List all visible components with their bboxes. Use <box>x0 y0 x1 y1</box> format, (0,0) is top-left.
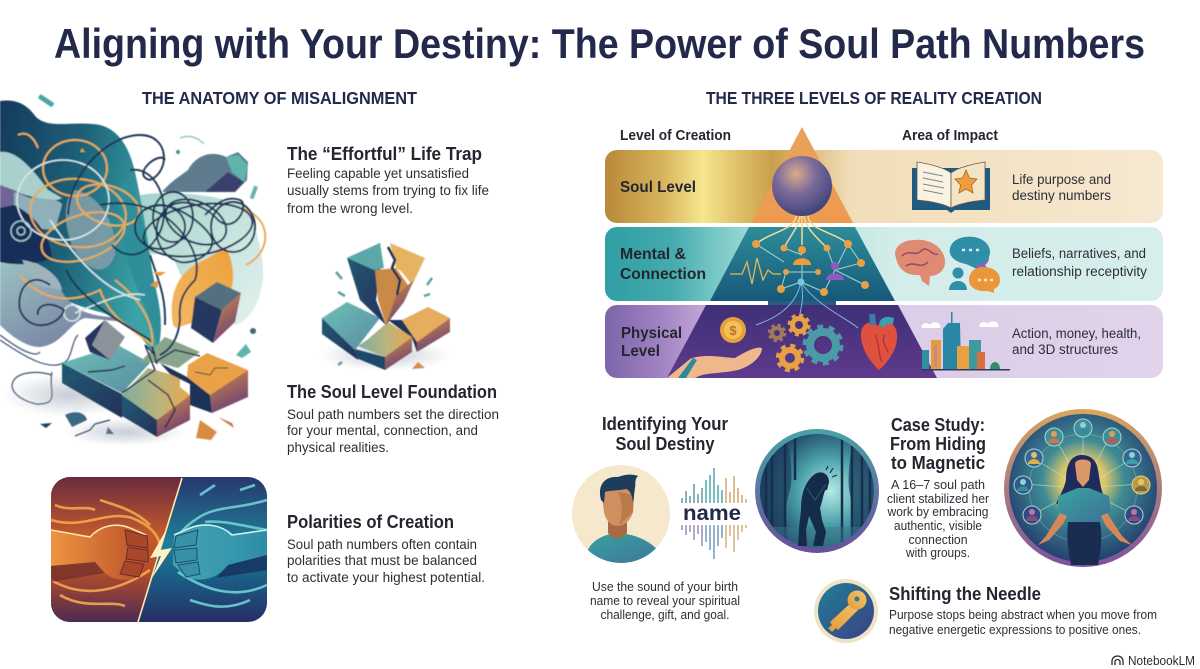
text: birth name instructions: Use the sound of your birth <box>592 580 738 594</box>
illustration: hiding figure behind bars <box>755 429 879 560</box>
icon: golden key <box>814 579 878 643</box>
heading: identifying your soul destiny: Identifying Your <box>602 414 728 434</box>
text: polarities of creation: Soul path numbers often contain <box>287 537 477 552</box>
band: physical level <box>605 305 1163 378</box>
text: the effortful life trap: from the wrong level. <box>287 201 413 216</box>
illustration: person portrait <box>572 465 670 567</box>
text: birth name instructions: name to reveal your spiritual <box>590 594 740 608</box>
icon: coin in open hand: $ <box>729 323 737 338</box>
text: birth name instructions <box>590 580 740 622</box>
panel: clashing fists illustration <box>51 477 267 622</box>
text: polarities of creation: to activate your highest potential. <box>287 570 485 585</box>
text: the effortful life trap: Feeling capable yet unsatisfied <box>287 166 469 181</box>
icon: brain and speech bubbles <box>895 237 1000 293</box>
band: mental and connection: Connection <box>620 266 706 283</box>
text: the soul level foundation: physical realities. <box>287 440 389 455</box>
band: soul level: destiny numbers <box>1012 188 1111 203</box>
soul sphere <box>772 156 832 216</box>
text: the effortful life trap: usually stems from trying to fix life <box>287 183 489 198</box>
icon: city skyline <box>922 312 1010 370</box>
icon: gears <box>769 315 842 370</box>
icon: open book with star <box>912 162 990 213</box>
text: case study body: authentic, visible <box>894 518 982 533</box>
cracked slab <box>40 328 256 440</box>
text: the effortful life trap: The “Effortful” Life Trap <box>287 143 482 164</box>
icon: broken block on cracked slabs <box>319 243 451 371</box>
icon: sound wave with name: name <box>683 502 741 525</box>
text: the soul level foundation: Soul path numbers set the direction <box>287 407 499 422</box>
heading: identifying your soul destiny: Soul Destiny <box>616 434 714 454</box>
band: soul level: Life purpose and <box>1012 172 1111 187</box>
band: physical level: Physical <box>621 325 682 342</box>
text: case study body: client stabilized her <box>887 491 990 506</box>
text: birth name instructions: challenge, gift, and goal. <box>600 608 730 622</box>
heading: case study <box>890 414 986 473</box>
watermark: notebooklm: NotebookLM <box>1128 654 1195 668</box>
band: physical level: Action, money, health, <box>1012 326 1141 341</box>
woman figure <box>1038 455 1132 565</box>
pyramid <box>667 127 937 378</box>
heading: case study: to Magnetic <box>891 452 985 473</box>
tangled scribble lines <box>11 134 265 355</box>
band: physical level: Level <box>621 343 660 360</box>
tumbling cube <box>85 320 125 360</box>
text: the soul level foundation: for your mental, connection, and <box>287 423 478 438</box>
band: physical level: and 3D structures <box>1012 342 1118 357</box>
band: soul level: Soul Level <box>620 179 696 196</box>
band: mental and connection <box>605 227 1163 301</box>
heading: the anatomy of misalignment: THE ANATOMY OF MISALIGNMENT <box>142 88 417 108</box>
icon: heart <box>861 314 897 370</box>
heading: identifying your soul destiny <box>602 414 728 454</box>
text: polarities of creation <box>287 511 485 585</box>
text: shifting the needle: Shifting the Needle <box>889 583 1041 604</box>
text: the soul level foundation <box>287 381 499 455</box>
text: case study body: with groups. <box>905 545 970 560</box>
text: polarities of creation: polarities that must be balanced <box>287 553 477 568</box>
illustration: magnetic woman with connections <box>1004 409 1162 567</box>
text: shifting the needle: Purpose stops being abstract when you move from <box>889 607 1157 622</box>
column heading: area of impact: Area of Impact <box>902 128 998 144</box>
band: mental and connection: Mental & <box>620 246 686 263</box>
text: the soul level foundation: The Soul Level Foundation <box>287 381 497 402</box>
band: mental and connection: relationship receptivity <box>1012 264 1147 279</box>
text: shifting the needle: negative energetic expressions to positive ones. <box>889 622 1141 637</box>
icon: coin in open hand <box>667 317 762 378</box>
storm cloud block <box>162 152 248 192</box>
rays from sphere <box>756 216 848 248</box>
heading: case study: From Hiding <box>890 433 986 454</box>
network of person icons <box>1014 419 1150 524</box>
icon: sound wave with name <box>682 468 746 559</box>
band: mental and connection: Beliefs, narratives, and <box>1012 246 1146 261</box>
band: soul level <box>605 150 1163 223</box>
text: case study body: connection <box>908 532 968 547</box>
network nodes <box>730 244 865 328</box>
text: polarities of creation: Polarities of Creation <box>287 511 454 532</box>
text: case study body: A 16–7 soul path <box>891 477 985 492</box>
heading: the three levels of reality creation: THE THREE LEVELS OF REALITY CREATION <box>706 88 1042 108</box>
column heading: level of creation: Level of Creation <box>620 128 731 144</box>
text: case study body <box>887 477 990 560</box>
heading: case study: Case Study: <box>891 414 985 435</box>
text: the effortful life trap <box>287 143 489 216</box>
text: case study body: work by embracing <box>887 504 988 519</box>
illustration: tangled mind over cracked foundation <box>0 94 265 446</box>
person nodes <box>793 246 844 280</box>
text: shifting the needle <box>889 583 1157 637</box>
floating cube <box>191 282 241 343</box>
